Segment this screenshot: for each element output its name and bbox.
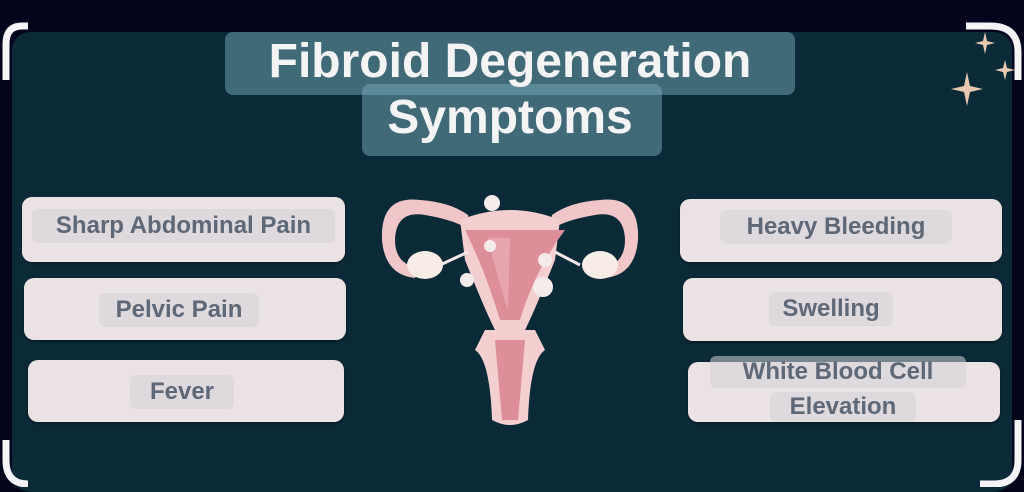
symptom: Sharp Abdominal Pain	[22, 197, 345, 262]
title: Symptoms	[387, 91, 633, 144]
symptom: Pelvic Pain: Pelvic Pain	[116, 296, 242, 323]
symptom: Swelling: Swelling	[782, 295, 880, 322]
title	[225, 32, 795, 156]
symptom: Fever	[28, 360, 344, 422]
symptom: Heavy Bleeding: Heavy Bleeding	[747, 213, 925, 240]
symptom: White Blood Cell Elevation	[688, 362, 1000, 422]
title: Fibroid Degeneration	[269, 35, 751, 88]
symptom: White Blood Cell Elevation: Elevation	[790, 393, 896, 420]
symptom: Fever: Fever	[150, 378, 214, 405]
symptom: White Blood Cell Elevation: White Blood Cell	[743, 358, 933, 385]
symptom: Pelvic Pain	[24, 278, 346, 340]
icon: sparkles	[951, 32, 1015, 106]
symptom: Sharp Abdominal Pain: Sharp Abdominal Pain	[56, 212, 311, 239]
symptom: Swelling	[683, 278, 1002, 341]
symptom: Heavy Bleeding	[680, 199, 1002, 262]
illustration: uterus	[382, 195, 638, 425]
